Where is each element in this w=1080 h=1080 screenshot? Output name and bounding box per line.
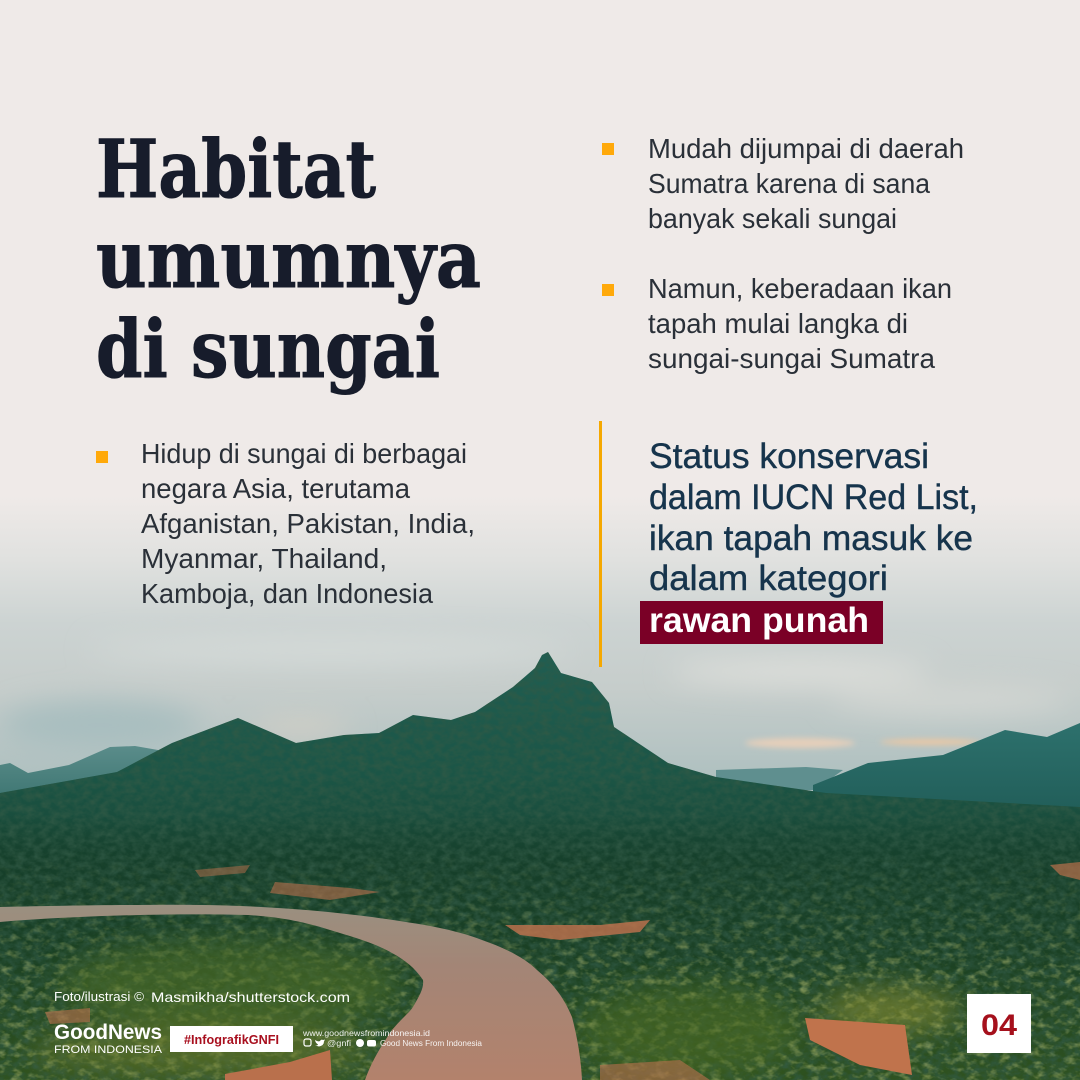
callout text: dalam IUCN Red List, [649,478,978,517]
icon: twitter [315,1040,325,1046]
website and social handles: www.goodnewsfromindonesia.id [302,1028,430,1038]
sunlit tree texture [0,850,1080,1080]
callout text: dalam kategori [649,559,888,598]
bullet marker [602,284,614,296]
distant mountain centre [716,767,843,790]
callout accent line [599,421,602,667]
bullet list item: Sumatra [602,133,964,234]
title: Habitat [96,122,376,216]
bullet text: Kamboja, dan Indonesia [141,578,433,609]
bullet text: Mudah dijumpai di daerah [648,133,964,164]
website and social handles [302,1028,483,1048]
sunset glow [745,738,980,748]
hashtag badge [170,1026,293,1052]
title [96,122,481,396]
callout: conservation status [599,421,978,667]
bullet marker [96,451,108,463]
page number: 04 [981,1009,1017,1042]
highlight: rawan punah: rawan punah [649,601,869,640]
title: umumnya [96,212,481,306]
callout text: ikan tapah masuk ke [649,519,973,558]
hashtag badge: #InfografikGNFI [184,1032,279,1047]
main mountain ridge [0,652,1080,866]
logo: GoodNews From Indonesia: GoodNews [54,1021,162,1044]
bullet marker [602,143,614,155]
logo: GoodNews From Indonesia [54,1021,163,1056]
bullet text: sungai-sungai Sumatra [648,343,935,374]
bullet text: Hidup di sungai di berbagai [141,438,467,469]
bullet text [648,133,964,234]
icon: facebook [356,1039,364,1047]
logo: GoodNews From Indonesia: FROM INDONESIA [54,1044,163,1056]
bullet text: Myanmar, Thailand, [141,543,387,574]
sky [0,530,1080,792]
bullet text: negara Asia, terutama [141,473,410,504]
cleared earth patches [45,862,1080,1080]
photo credit: Foto/ilustrasi © [54,990,145,1004]
bullet text [141,438,475,609]
bullet text: banyak sekali sungai [648,203,897,234]
right mountain [813,723,1080,807]
bullet text: Namun, keberadaan ikan [648,273,952,304]
photo credit [54,989,350,1005]
website and social handles: Good News From Indonesia [380,1039,483,1048]
icon: youtube [367,1040,376,1046]
lower forest [0,851,1080,1080]
page number [967,994,1031,1053]
callout text: Status konservasi [649,437,929,476]
icon: instagram [304,1039,311,1046]
website and social handles: @gnfi [327,1039,351,1048]
near green slopes [30,940,960,1075]
background photo: sky and forested mountains [0,530,1080,1080]
bullet text: tapah mulai langka di [648,308,908,339]
forest texture [0,650,1080,1080]
title: di sungai [96,302,440,396]
river [0,905,582,1080]
distant mountains left [0,746,158,793]
clouds [7,656,1038,747]
bullet list item: scarcity [602,273,952,374]
bullet text: Afganistan, Pakistan, India, [141,508,475,539]
callout text [649,437,978,598]
bullet text: Sumatra karena di sana [648,168,930,199]
bullet list item: Asia [96,438,475,609]
bullet text [648,273,952,374]
photo credit: Masmikha/shutterstock.com [151,989,350,1005]
